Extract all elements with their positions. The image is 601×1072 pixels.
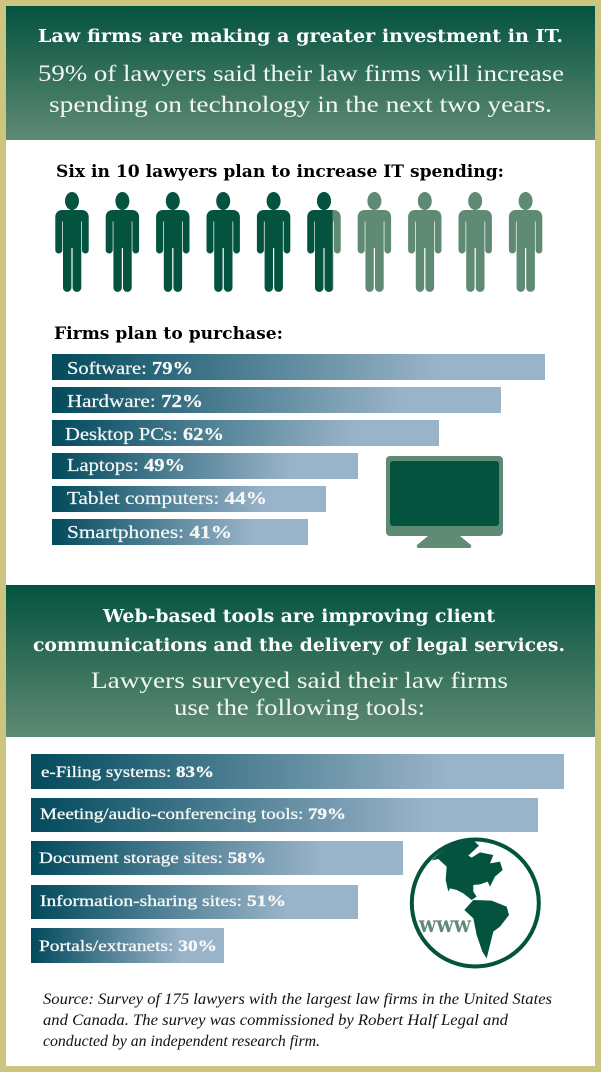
panel: web-based tools header <box>6 585 595 737</box>
bar: hardware: Hardware: 72% <box>67 391 203 411</box>
bar: laptops: Laptops: 49% <box>67 455 185 475</box>
bar: software <box>52 354 545 380</box>
pictogram: six in ten people <box>55 192 542 292</box>
bar: tablet computers <box>52 486 326 512</box>
bar: meeting tools <box>31 798 538 832</box>
text: spending statistic line two: spending on technology in the next two years. <box>49 92 552 117</box>
heading: firms plan to purchase: Firms plan to purchase: <box>54 324 283 343</box>
heading: law firms investment: Law firms are making a greater investment in IT. <box>38 27 563 47</box>
bar: document storage sites: Document storage sites: 58% <box>39 850 266 867</box>
text: spending statistic: 59% of lawyers said their law firms will increase <box>38 61 564 86</box>
text: lawyers surveyed line two: use the following tools: <box>174 695 425 720</box>
bar: hardware <box>52 387 501 413</box>
bar: meeting tools: Meeting/audio-conferencing tools: 79% <box>40 806 346 823</box>
bar: e-filing systems <box>31 754 564 789</box>
bar: software: Software: 79% <box>67 358 193 378</box>
bar: laptops <box>52 453 358 479</box>
icon: globe with www <box>412 840 539 966</box>
bar: document storage sites <box>31 841 403 875</box>
source note <box>43 991 552 1050</box>
icon: desktop monitor <box>386 456 503 548</box>
heading: six in ten lawyers: Six in 10 lawyers plan to increase IT spending: <box>56 162 504 181</box>
panel: IT investment header <box>6 6 595 140</box>
bar: desktop PCs <box>52 420 439 446</box>
bar chart: purchases <box>52 354 545 545</box>
bar: smartphones: Smartphones: 41% <box>67 522 232 542</box>
source note: and Canada. The survey was commissioned by Robert Half Legal and <box>43 1012 508 1029</box>
bar: tablet computers: Tablet computers: 44% <box>67 488 267 508</box>
text: lawyers surveyed: Lawyers surveyed said their law firms <box>91 668 508 693</box>
heading: web-based tools: Web-based tools are improving client <box>102 607 495 627</box>
heading: web-based tools line two: communications and the delivery of legal services. <box>33 636 565 656</box>
bar: information-sharing sites <box>31 885 358 919</box>
bar: portals and extranets: Portals/extranets: 30% <box>39 938 217 955</box>
icon: globe with www: WWW <box>418 917 472 936</box>
source note: Source: Survey of 175 lawyers with the largest law firms in the United States <box>43 991 552 1008</box>
bar: e-filing systems: e-Filing systems: 83% <box>41 764 214 781</box>
bar: information-sharing sites: Information-sharing sites: 51% <box>40 893 286 910</box>
bar: desktop PCs: Desktop PCs: 62% <box>65 424 224 444</box>
bar chart: tools <box>31 754 564 963</box>
bar: smartphones <box>52 519 308 545</box>
source note: conducted by an independent research firm. <box>43 1033 320 1050</box>
bar: portals and extranets <box>31 928 224 963</box>
